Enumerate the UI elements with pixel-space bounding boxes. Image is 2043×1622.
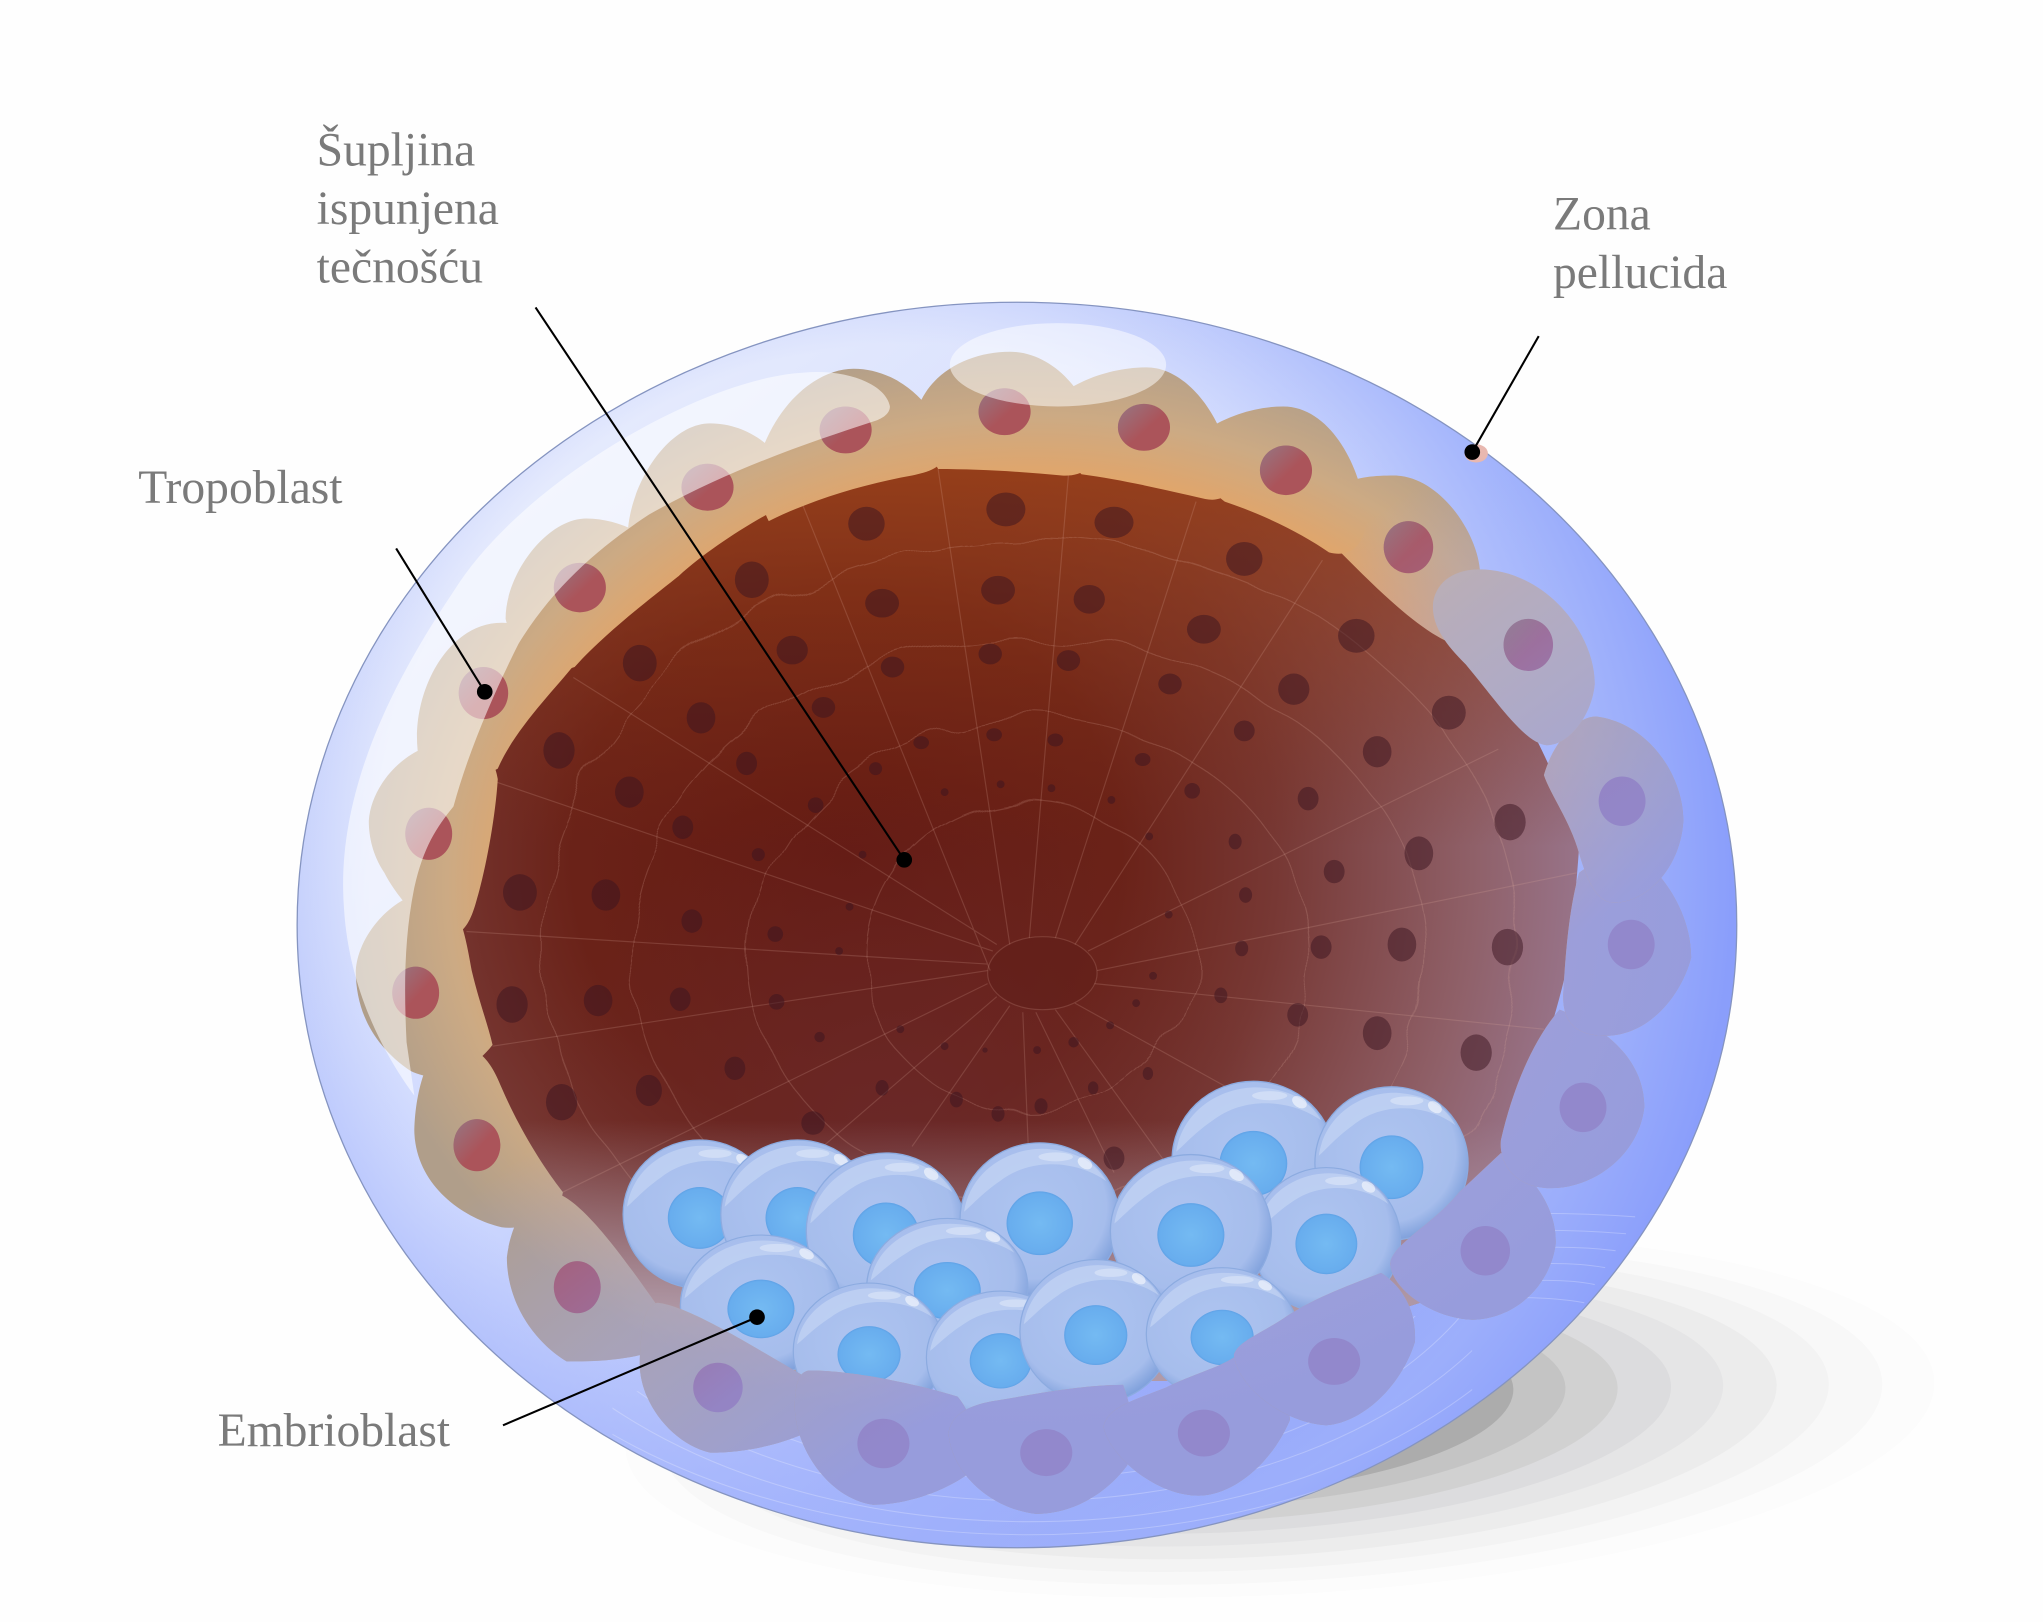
cell bbox=[1234, 1273, 1415, 1425]
highlight: left crescent reflection bbox=[343, 372, 890, 1096]
callout: fluid-filled cavity: Šupljina bbox=[317, 122, 475, 176]
cavity dots: inner cell surface nuclei bbox=[496, 492, 1526, 1170]
cell bbox=[417, 623, 575, 783]
callout: embryoblast bbox=[218, 1309, 765, 1457]
cell bbox=[1433, 569, 1595, 745]
cell bbox=[356, 892, 493, 1077]
cell bbox=[1104, 1358, 1290, 1496]
callout: trophoblast: Tropoblast bbox=[138, 462, 343, 514]
callout: zona pellucida: pellucida bbox=[1553, 247, 1727, 299]
cell bbox=[369, 743, 498, 935]
cell bbox=[949, 1385, 1133, 1514]
infographic: blastocyst cross-section bbox=[139, 124, 1829, 1572]
callout: trophoblast bbox=[138, 462, 493, 700]
cell bbox=[414, 1045, 563, 1228]
ground shadow bbox=[616, 1201, 1944, 1622]
cell bbox=[1327, 476, 1480, 641]
cell bbox=[1390, 1153, 1556, 1320]
cell bbox=[640, 1303, 812, 1453]
cavity web of cell borders bbox=[466, 469, 1576, 1198]
callout: embryoblast: Embrioblast bbox=[218, 1405, 450, 1457]
highlight: top ellipse reflection bbox=[950, 323, 1166, 406]
cell bbox=[1563, 857, 1691, 1036]
callout: fluid-filled cavity bbox=[317, 122, 912, 868]
cell bbox=[506, 519, 679, 670]
callout: fluid-filled cavity: ispunjena bbox=[317, 183, 499, 235]
callout: fluid-filled cavity: tečnošću bbox=[317, 242, 483, 294]
callout: zona pellucida: Zona bbox=[1553, 188, 1651, 240]
cell bbox=[918, 352, 1097, 476]
cell bbox=[795, 1371, 975, 1505]
cell bbox=[1544, 717, 1683, 903]
cell bbox=[758, 369, 945, 521]
faint concentric lines in lower sphere bbox=[417, 784, 1642, 1535]
cell bbox=[1055, 367, 1231, 500]
cell bbox=[507, 1192, 665, 1361]
cell bbox=[628, 423, 800, 579]
trophoblast: ring of cells bbox=[356, 352, 1691, 1514]
zona pellucida sphere bbox=[297, 302, 1737, 1548]
callout: zona pellucida bbox=[1464, 188, 1727, 462]
nuclei shading bbox=[392, 388, 1553, 1171]
embryoblast: inner cell mass bbox=[623, 1081, 1468, 1424]
cell bbox=[1199, 406, 1366, 554]
fluid-filled cavity bbox=[443, 443, 1616, 1394]
cell bbox=[1501, 1010, 1644, 1188]
